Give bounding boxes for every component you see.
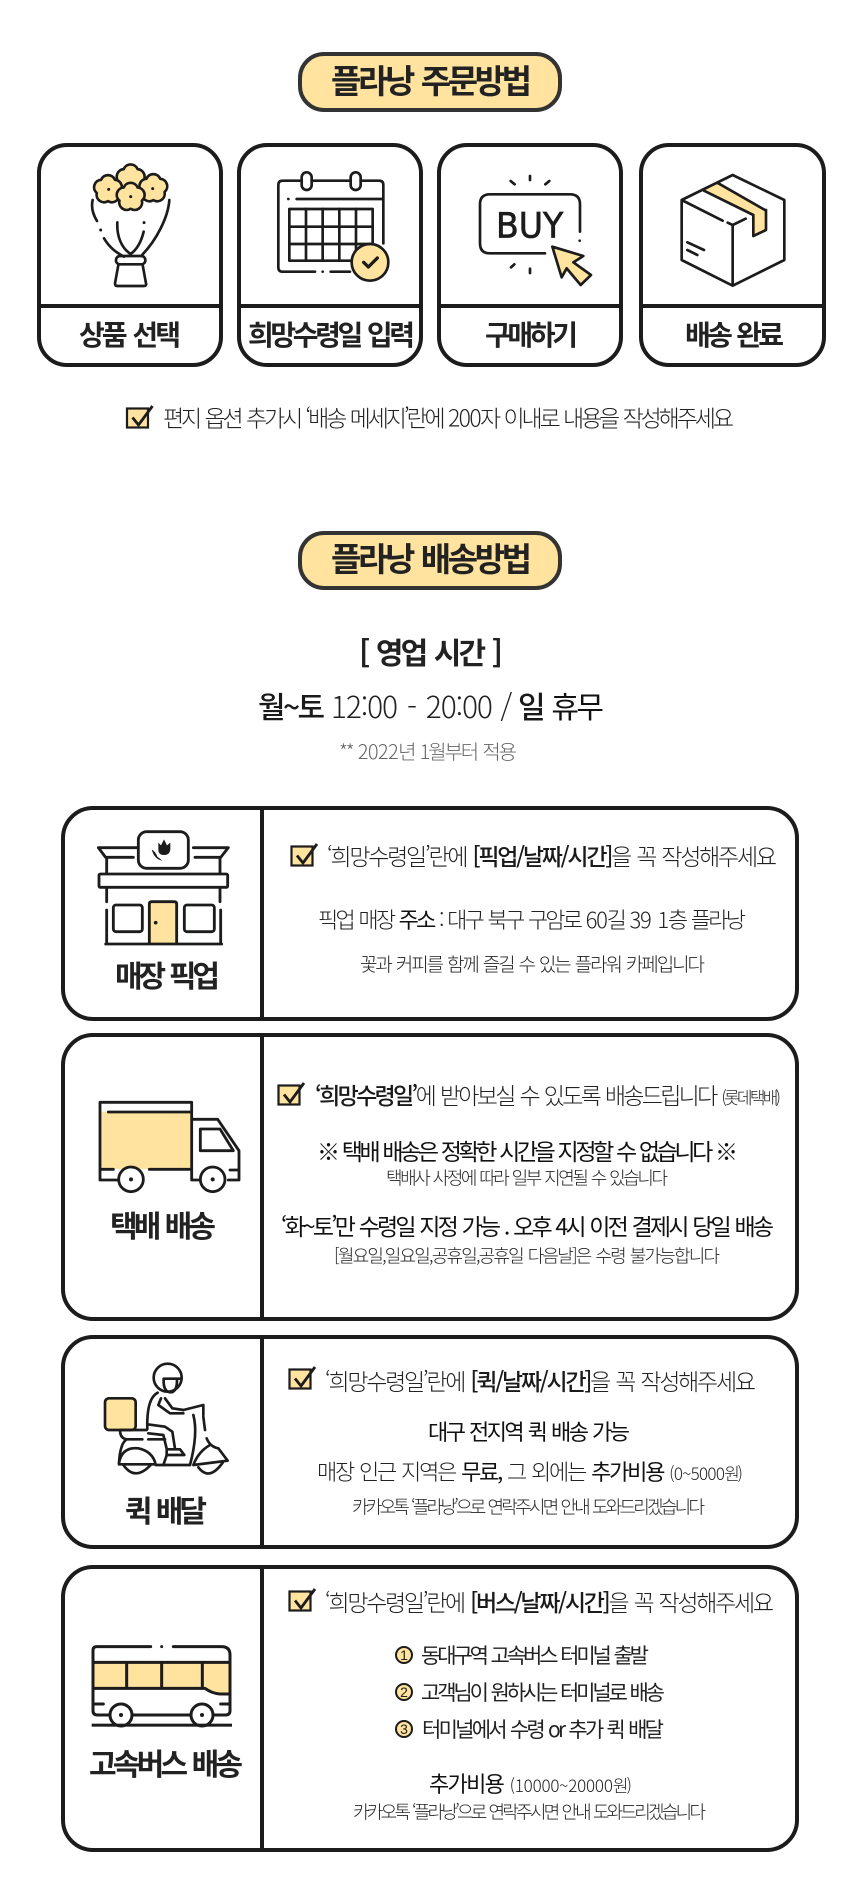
label: 매장 픽업: 매장 픽업	[115, 952, 220, 996]
text: exact time warning: ※ 택배 배송은 정확한 시간을 지정할 수 없습니다 ※	[317, 1133, 738, 1167]
title: 플라낭 배송방법: 플라낭 배송방법	[331, 533, 532, 581]
step 2: 고객님이 원하시는 터미널로 배송	[421, 1677, 665, 1707]
panel: 구매하기 step card	[439, 145, 621, 365]
text: applies from January 2022: ** 2022년 1월부터 적용	[339, 736, 517, 765]
title: 플라낭 주문방법: 플라낭 주문방법	[331, 55, 532, 103]
text: pickup instruction: ‘희망수령일’란에 [픽업/날짜/시간]을 꼭 작성해주세요	[327, 838, 777, 872]
label: 구매하기: 구매하기	[485, 314, 578, 354]
step 2: 2	[400, 1684, 408, 1700]
text: cafe description: 꽃과 커피를 함께 즐길 수 있는 플라워 카페입니다	[360, 950, 705, 977]
note: letter option message: 편지 옵션 추가시 ‘배송 메세지’란에 200자 이내로 내용을 작성해주세요	[163, 400, 734, 434]
icon: delivery truck	[100, 1102, 239, 1192]
heading: 영업 시간: [ 영업 시간 ]	[359, 629, 503, 673]
label: 배송 완료: 배송 완료	[685, 314, 784, 354]
text: possible delay note: 택배사 사정에 따라 일부 지연될 수 있습니다	[386, 1164, 668, 1190]
text: extra fee: 추가비용 (10000~20000원)	[429, 1767, 632, 1799]
icon: calendar with check badge	[278, 172, 388, 281]
panel: quick delivery	[63, 1337, 797, 1547]
text: bus instruction: ‘희망수령일’란에 [버스/날짜/시간]을 꼭 작성해주세요	[325, 1584, 774, 1618]
icon: express bus	[92, 1647, 232, 1727]
icon: buy button with cursor: BUY	[496, 206, 564, 246]
title: 플라낭 주문방법	[300, 54, 560, 110]
text: delivery day rule: ‘화~토’만 수령일 지정 가능 . 오후 4시 이전 결제시 당일 배송	[281, 1208, 774, 1242]
text: quick delivery cost: 매장 인근 지역은 무료, 그 외에는 추가비용 (0~5000원)	[317, 1455, 743, 1487]
text: delivery promise: ‘희망수령일’에 받아보실 수 있도록 배송드립니다 (롯데택배)	[315, 1077, 781, 1111]
text: KakaoTalk contact: 카카오톡 ‘플라낭’으로 연락주시면 안내 도와드리겠습니다	[352, 1494, 705, 1520]
icon: flower bouquet	[92, 164, 169, 286]
label: 상품 선택: 상품 선택	[79, 314, 181, 354]
icon: scooter courier	[105, 1364, 228, 1473]
step 1: 1	[400, 1647, 408, 1663]
title: 플라낭 배송방법	[300, 533, 560, 588]
icon: check mark	[292, 844, 317, 866]
step 3: 터미널에서 수령 or 추가 퀵 배달	[422, 1714, 664, 1744]
icon: check mark	[290, 1367, 315, 1388]
text: opening hours: 월~토 12:00 - 20:00 / 일 휴무	[258, 683, 604, 727]
step 3: 3	[400, 1721, 408, 1737]
icon: buy button with cursor	[480, 176, 591, 285]
panel: express bus delivery	[63, 1567, 797, 1850]
text: KakaoTalk contact: 카카오톡 ‘플라낭’으로 연락주시면 안내 도와드리겠습니다	[353, 1798, 706, 1824]
panel: 배송 완료 step card	[641, 145, 824, 365]
text: pickup address: 픽업 매장 주소 : 대구 북구 구암로 60길 39 1층 플라낭	[318, 903, 746, 935]
label: 택배 배송: 택배 배송	[110, 1202, 216, 1246]
panel: store pickup	[63, 808, 797, 1019]
icon: check mark	[290, 1589, 315, 1610]
step 1: 동대구역 고속버스 터미널 출발	[421, 1640, 649, 1670]
icon: parcel box	[682, 175, 784, 286]
label: 퀵 배달: 퀵 배달	[125, 1487, 207, 1531]
text: unavailable days note: [월요일,일요일,공휴일,공휴일 다음날]은 수령 불가능합니다	[334, 1242, 720, 1268]
panel: 희망수령일 입력 step card	[239, 145, 421, 365]
label: 희망수령일 입력: 희망수령일 입력	[248, 314, 415, 354]
text: quick instruction: ‘희망수령일’란에 [퀵/날짜/시간]을 꼭 작성해주세요	[325, 1363, 756, 1397]
panel: 상품 선택 step card	[39, 145, 221, 365]
icon: flower shop storefront	[98, 832, 228, 944]
label: 고속버스 배송: 고속버스 배송	[89, 1740, 243, 1784]
panel: parcel delivery	[63, 1035, 797, 1319]
text: Daegu coverage: 대구 전지역 퀵 배송 가능	[428, 1415, 630, 1447]
icon: check mark	[278, 1083, 304, 1104]
